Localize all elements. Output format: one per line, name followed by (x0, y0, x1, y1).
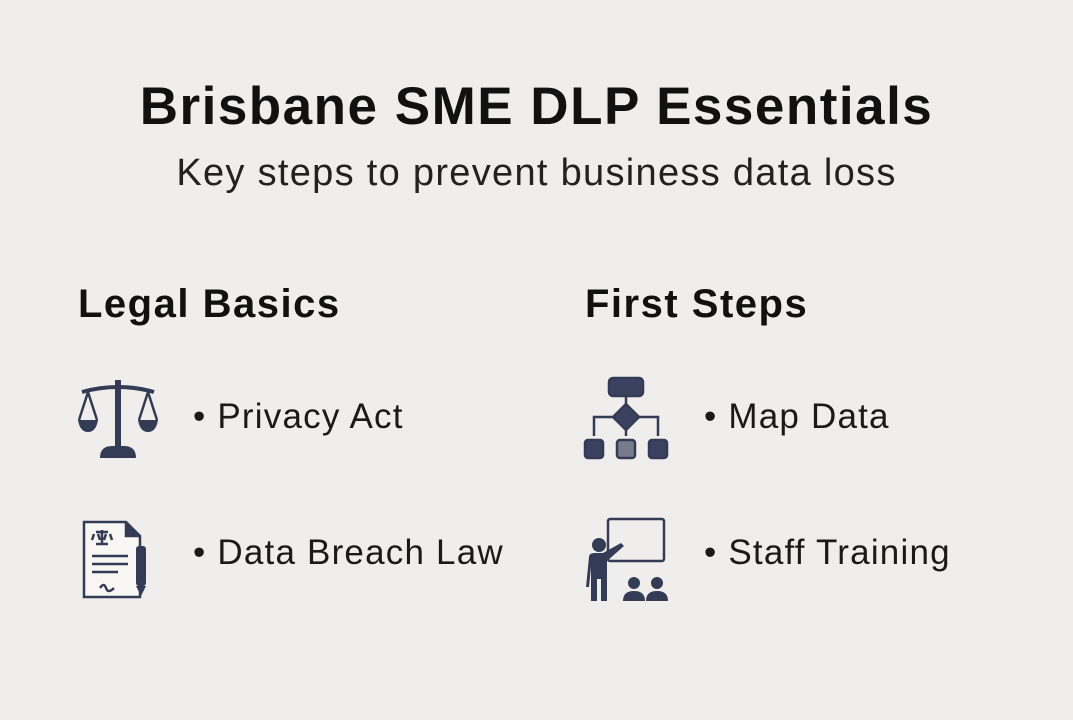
subtitle: Key steps to prevent business data loss (176, 152, 897, 194)
icon: staff training (586, 518, 668, 601)
bullet text: Staff Training: • Staff Training (704, 533, 951, 572)
icon: scales (78, 380, 158, 458)
heading: Legal Basics: Legal Basics (78, 282, 341, 326)
icon: flowchart (584, 376, 668, 460)
bullet text: Privacy Act: • Privacy Act (193, 397, 404, 436)
title: Brisbane SME DLP Essentials (140, 77, 933, 136)
heading: First Steps: First Steps (585, 282, 808, 326)
icon: legal document with pen (82, 520, 146, 598)
bullet text: Map Data: • Map Data (704, 397, 890, 436)
bullet text: Data Breach Law: • Data Breach Law (193, 533, 504, 572)
